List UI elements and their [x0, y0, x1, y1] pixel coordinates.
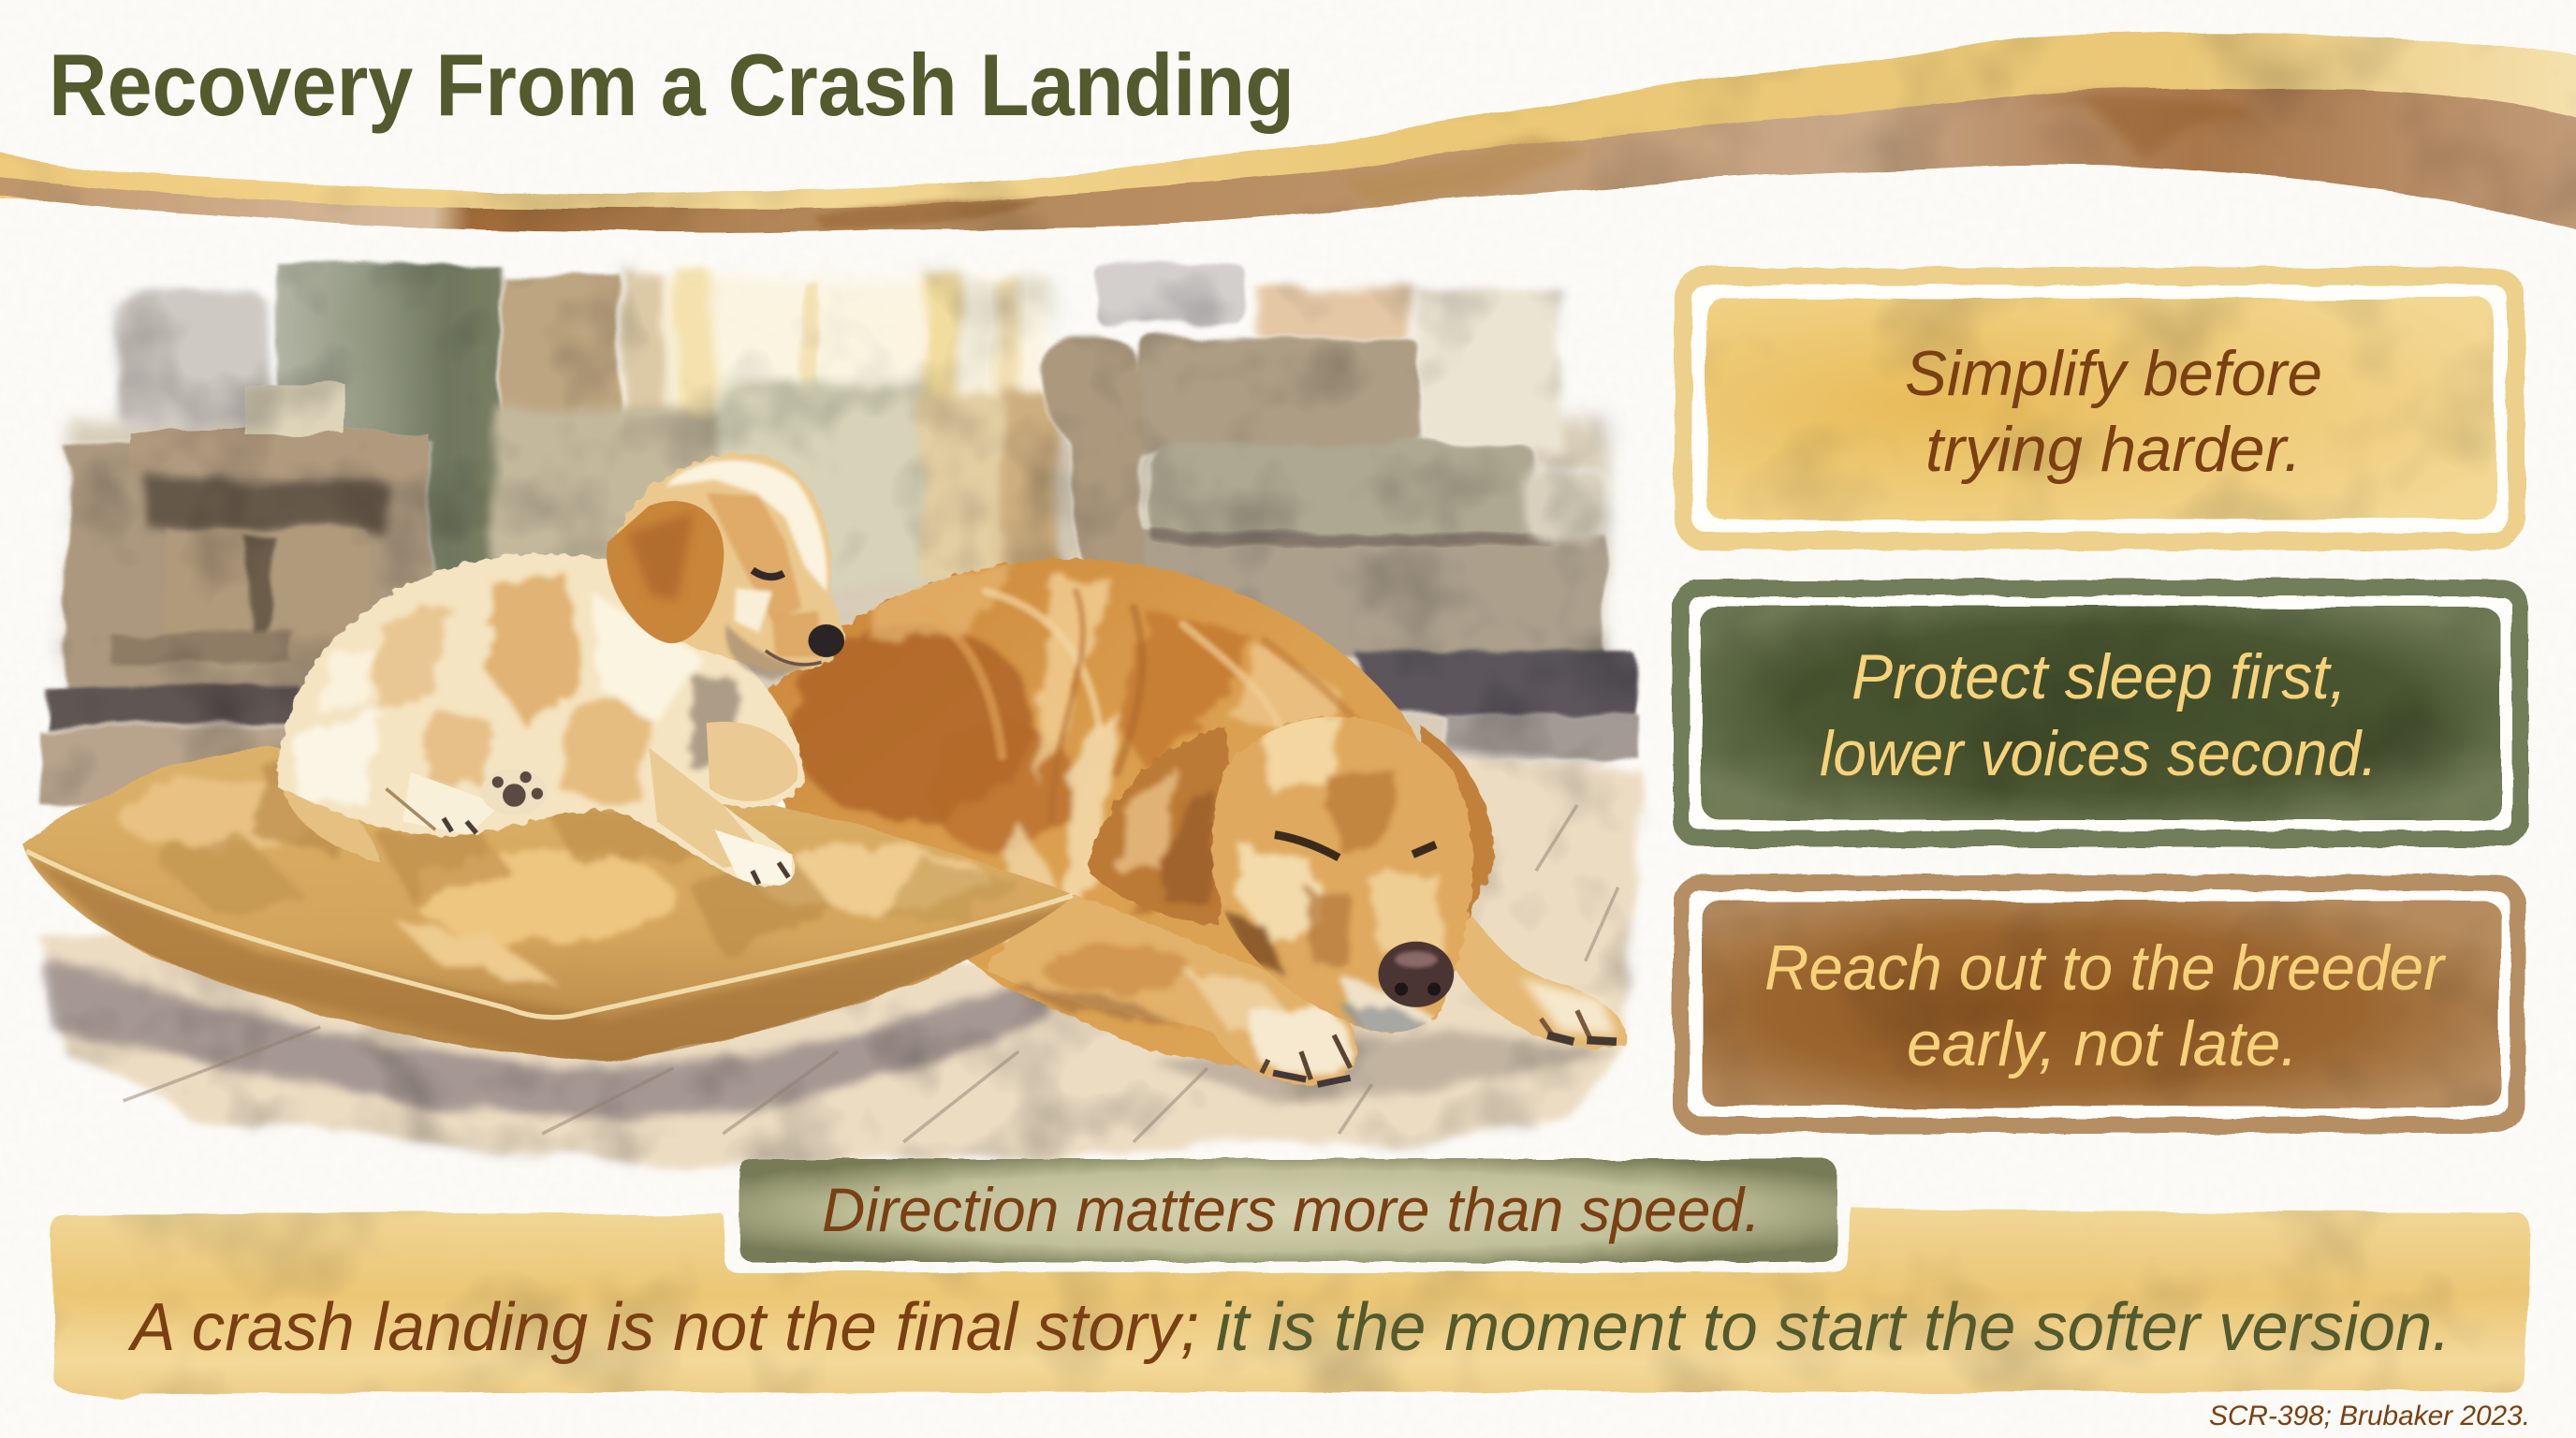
- text: lower voices second.: [1820, 718, 2378, 789]
- ring: [1683, 276, 2516, 541]
- text: Simplify before: [1905, 338, 2322, 409]
- head shape: [1211, 717, 1472, 1033]
- puppy body: [278, 553, 802, 887]
- swoosh: brown layer: [0, 88, 2576, 232]
- puppy ear: [607, 501, 724, 643]
- illustration: sleeping golden retrievers: [23, 263, 1647, 1170]
- fill: [1702, 901, 2500, 1107]
- adult dog head: [1088, 707, 1493, 1042]
- ring: [1681, 883, 2517, 1125]
- pillow piping: [26, 851, 1073, 1018]
- statement text: A crash landing is not the final story;: [127, 1290, 1199, 1365]
- background room wash: [66, 263, 1610, 788]
- text: trying harder.: [1925, 414, 2302, 485]
- floor: [33, 753, 1647, 1170]
- puppy head: [611, 453, 844, 671]
- fill: [1702, 607, 2500, 820]
- statement text continuation: it is the moment to start the softer version.: [1216, 1290, 2451, 1365]
- pill text: Direction matters more than speed.: [822, 1175, 1761, 1244]
- sofa: [1038, 333, 1639, 762]
- panel: simplify: [1683, 276, 2516, 541]
- closed eyes: [1275, 835, 1339, 858]
- puppy paw pads: [481, 769, 547, 814]
- title: Recovery From a Crash Landing: [49, 36, 1295, 134]
- ring: [1681, 588, 2520, 839]
- decorative watercolor swoosh: [0, 32, 2576, 232]
- text: Protect sleep first,: [1852, 641, 2347, 712]
- adult dog body: [759, 559, 1430, 1068]
- text: [1820, 641, 2378, 789]
- puppy tail: [283, 756, 381, 862]
- text: early, not late.: [1907, 1008, 2298, 1079]
- panel: reach out: [1681, 883, 2517, 1125]
- fill: [1706, 299, 2495, 520]
- takeaway band: [50, 1210, 2530, 1400]
- pill: direction: [739, 1159, 1837, 1262]
- adult dog front legs: [986, 888, 1625, 1085]
- panel: protect sleep: [1681, 588, 2520, 839]
- left ear: [1088, 726, 1236, 925]
- puppy eye: [753, 570, 783, 577]
- text: [1764, 932, 2446, 1079]
- puppy nose: [808, 624, 844, 657]
- swoosh: gold layer: [0, 32, 2576, 225]
- text: Reach out to the breeder: [1764, 932, 2446, 1004]
- text: [1905, 338, 2322, 485]
- side table: [41, 388, 431, 805]
- source citation: SCR-398; Brubaker 2023.: [2209, 1401, 2530, 1431]
- floorboards: [124, 805, 1618, 1142]
- right ear: [1421, 726, 1493, 945]
- pillow: [23, 748, 1075, 1068]
- puppy: [278, 453, 844, 888]
- nose: [1378, 942, 1454, 1007]
